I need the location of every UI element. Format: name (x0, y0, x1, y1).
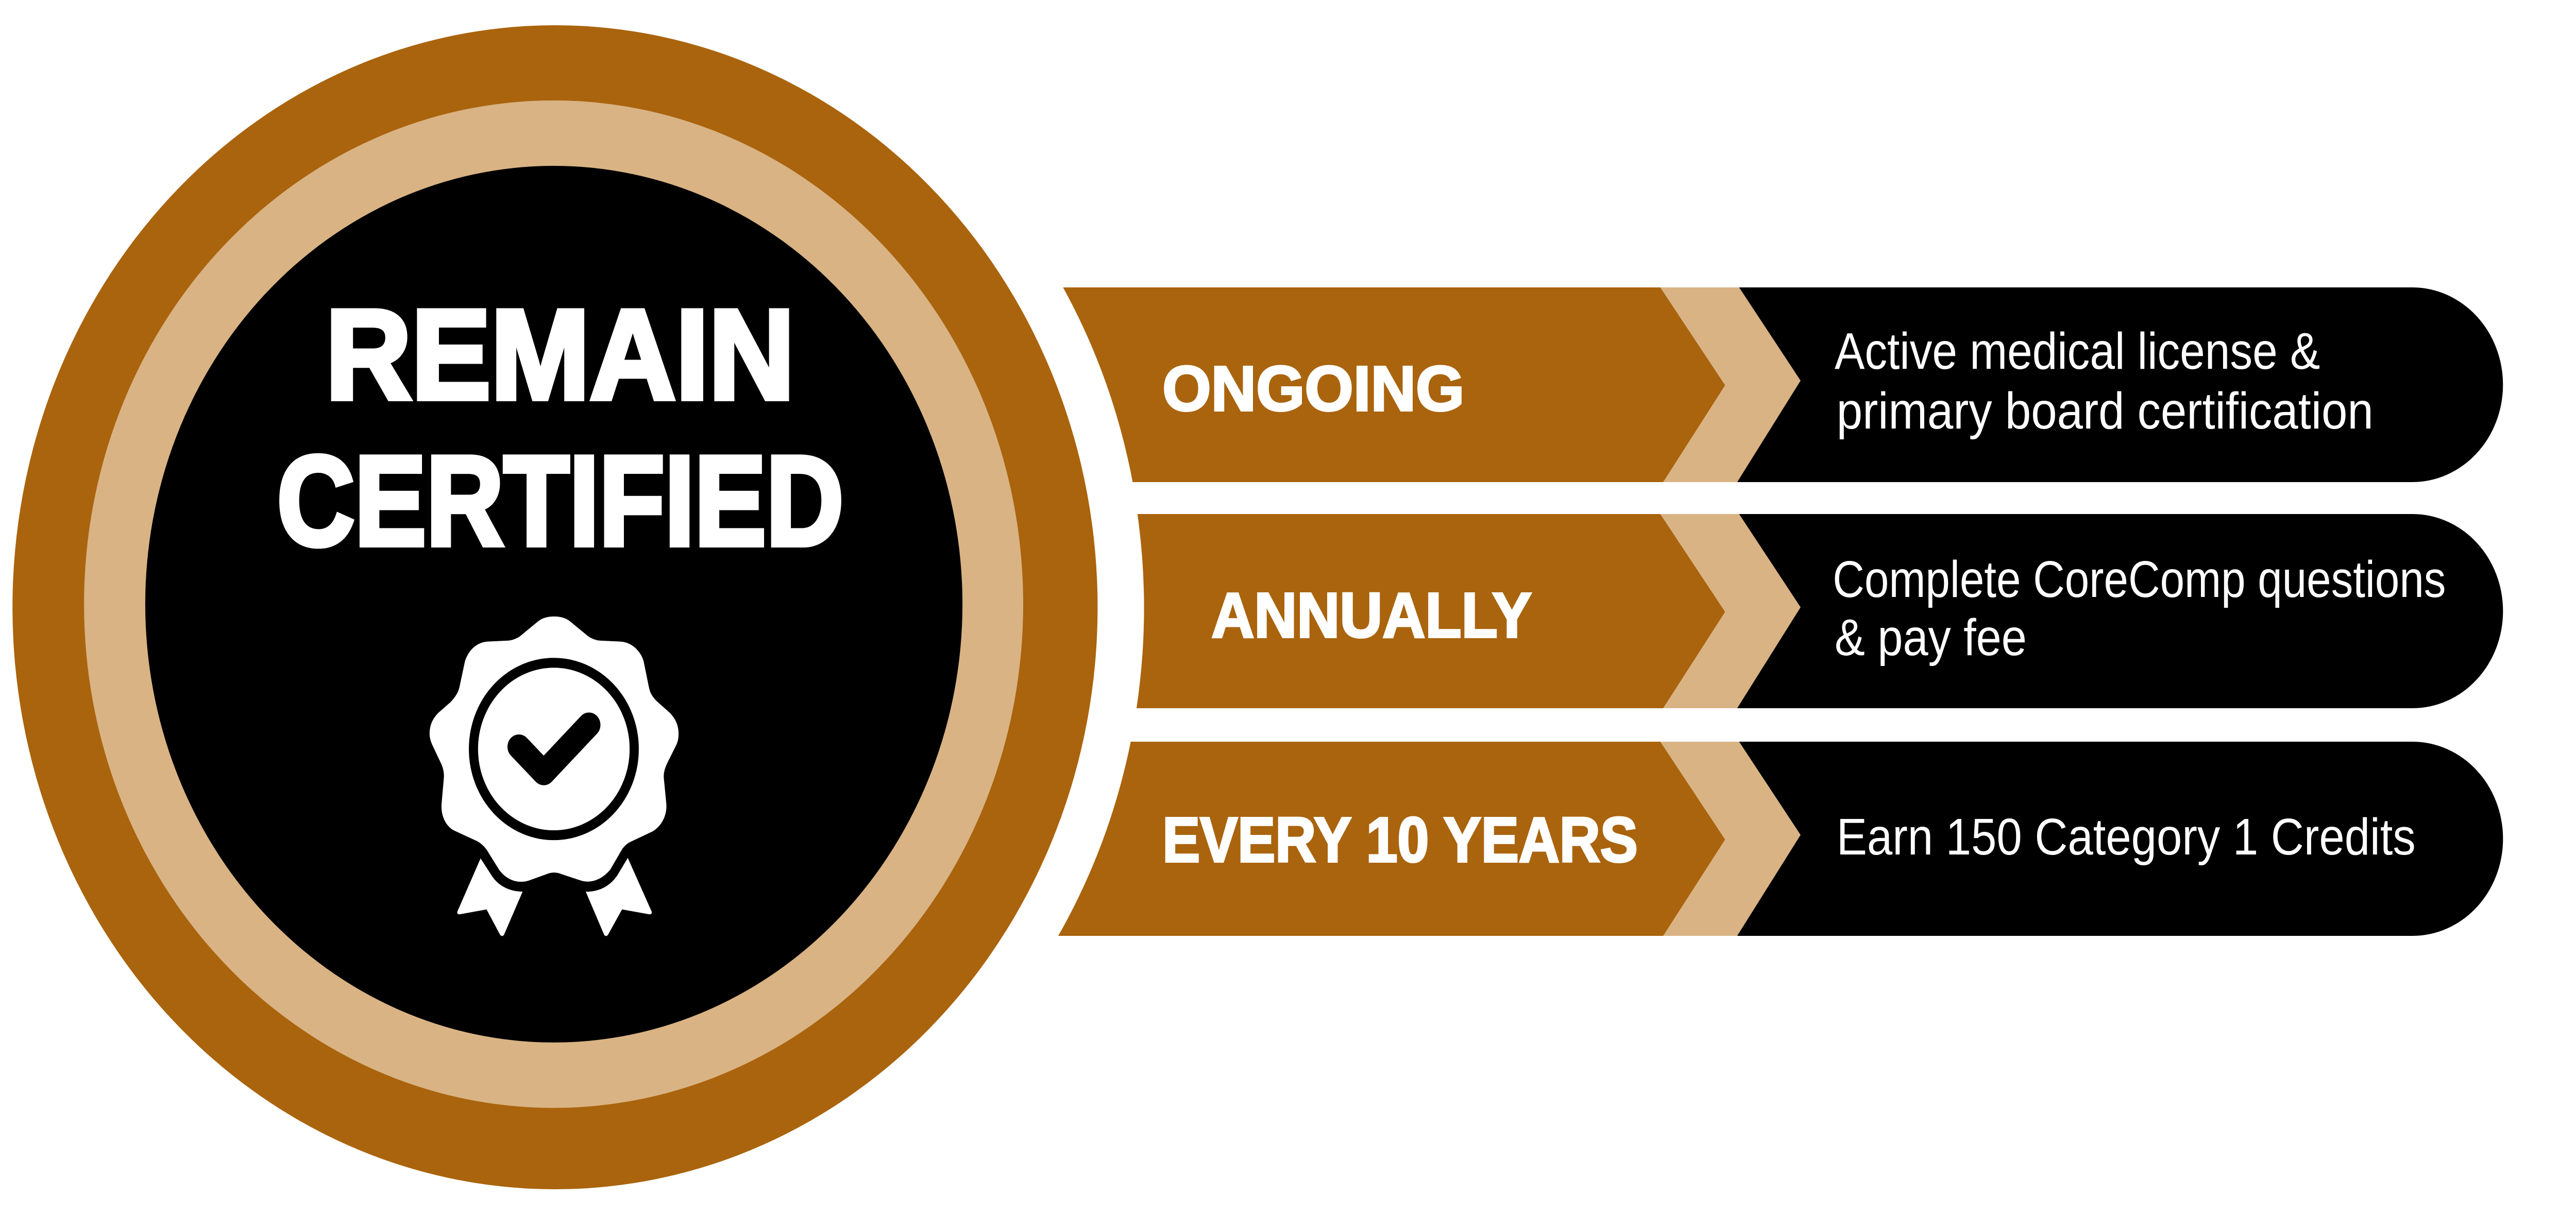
black description pill (1737, 287, 2503, 482)
tan chevron (1660, 742, 1801, 936)
description: Active medical license & (1835, 323, 2320, 380)
tan ring (84, 100, 1023, 1108)
left ribbon (457, 859, 522, 936)
title: Remain Certified (277, 283, 843, 572)
brown label arrow (1137, 514, 1725, 708)
row: ongoing (1063, 287, 2503, 482)
outer brown ring (12, 25, 1097, 1189)
description: primary board certification (1837, 383, 2374, 440)
black description pill (1737, 742, 2503, 936)
description (1835, 323, 2374, 440)
label: ONGOING (1162, 353, 1464, 424)
brown label arrow (1058, 742, 1725, 936)
label: EVERY 10 YEARS (1162, 805, 1638, 876)
check mark (519, 725, 589, 773)
icon: rosette award with check mark (430, 617, 679, 936)
tan chevron (1660, 287, 1801, 482)
description: Complete CoreComp questions (1833, 551, 2446, 608)
title line 2: CERTIFIED (277, 429, 843, 572)
description: & pay fee (1835, 609, 2027, 666)
brown label arrow (1063, 287, 1725, 482)
description (1833, 551, 2446, 666)
right ribbon (586, 858, 652, 936)
black description pill (1737, 514, 2503, 708)
tan chevron (1660, 514, 1801, 708)
black centre disc (145, 166, 962, 1042)
panel: concentric circle badge (12, 25, 1097, 1189)
description: Earn 150 Category 1 Credits (1837, 809, 2416, 866)
title line 1: REMAIN (326, 283, 794, 426)
rosette seal (430, 617, 679, 882)
label: ANNUALLY (1211, 580, 1532, 651)
seal inner ring (473, 663, 634, 835)
row: annually (1137, 514, 2503, 708)
row: every 10 years (1058, 742, 2503, 936)
